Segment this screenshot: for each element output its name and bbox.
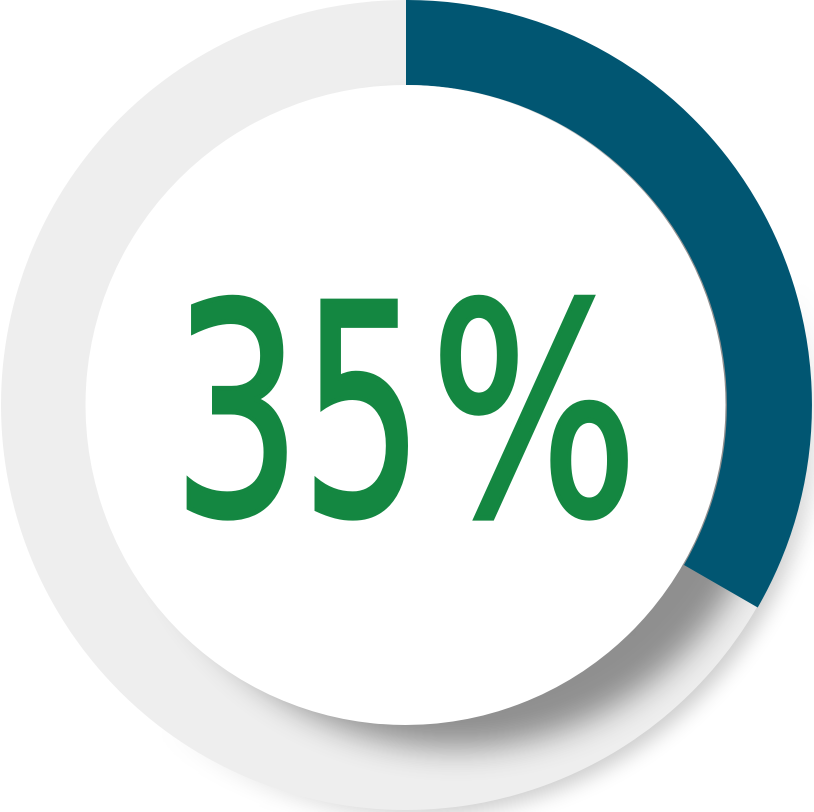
blue progress arc (406, 0, 812, 608)
percentage value: 3 (173, 244, 301, 584)
percentage value: % (430, 242, 638, 583)
inner white disc (86, 85, 726, 725)
percentage value (173, 242, 638, 584)
outer soft shadow (228, 343, 814, 812)
percentage value: 5 (301, 244, 423, 584)
inner shadow on ring (136, 108, 776, 748)
